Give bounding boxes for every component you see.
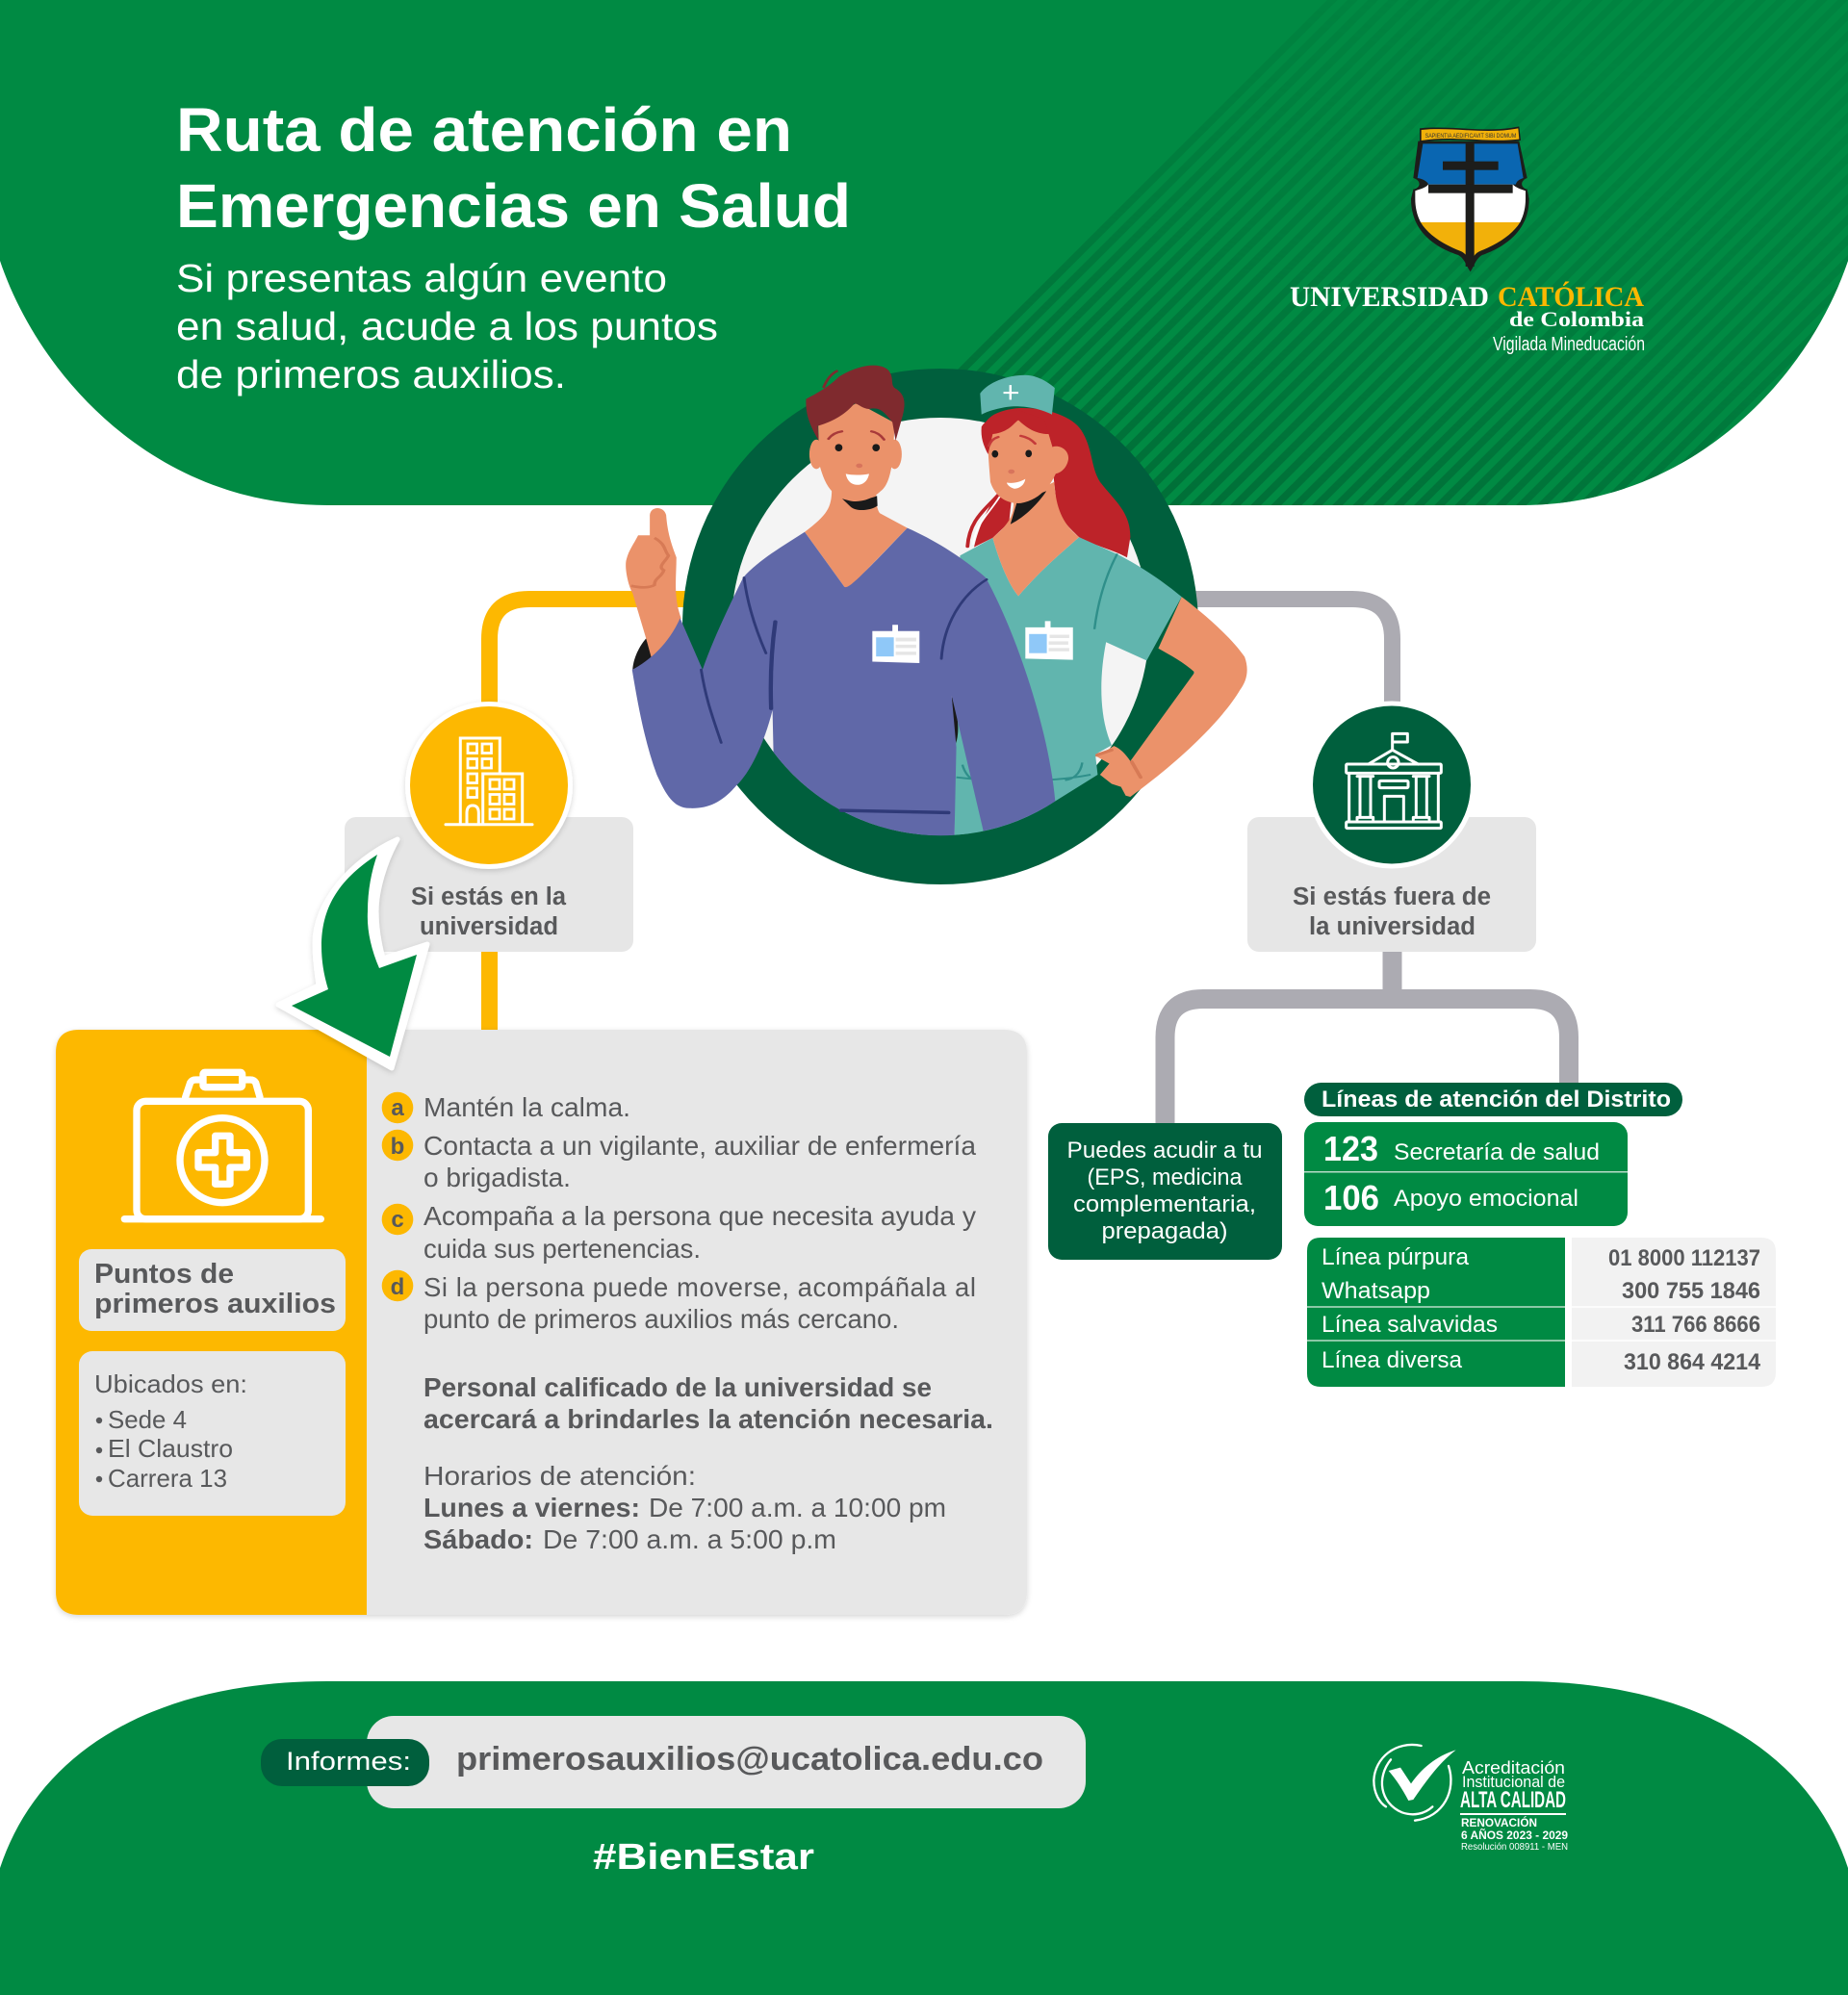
logo: Universidad Católica de Colombia [1290,126,1645,355]
opening hours: De 7:00 a.m. a 10:00 pm [649,1493,946,1522]
opening hours: Sábado: [424,1524,533,1554]
seal text: 6 AÑOS 2023 - 2029 [1461,1829,1568,1842]
box: inside the university: universidad [420,913,558,940]
title [176,95,851,241]
locations list: Sede 4 [108,1405,187,1434]
opening hours: Horarios de atención: [424,1461,696,1491]
hotline box: 123 and 106: Secretaría de salud [1394,1139,1600,1165]
logo wordmark [1290,281,1645,355]
seal text: Acreditación [1462,1758,1565,1778]
step c: Acompaña a la persona que necesita ayuda y [424,1201,976,1231]
box: EPS options: complementaria, [1073,1191,1256,1217]
subtitle: en salud, acude a los puntos [176,304,718,348]
seal text: Resolución 008911 - MEN [1461,1842,1568,1853]
icon: city buildings in yellow circle [405,702,573,869]
box: EPS options [1048,1123,1282,1260]
icon: shield: SAPIENTIA AEDIFICAVIT SIBI DOMUM [1425,133,1516,140]
logo wordmark: UNIVERSIDAD [1290,281,1489,313]
table: phone lines: Whatsapp [1322,1278,1430,1304]
box: inside the university: Si estás en la [411,883,567,910]
note: qualified staff [424,1372,993,1434]
connector lines: yellow and grey routes [489,599,1569,1126]
contact email pill: primerosauxilios@ucatolica.edu.co [456,1741,1043,1778]
hotline box: 123 and 106: Apoyo emocional [1394,1186,1578,1212]
icon: first aid kit [124,1072,321,1219]
step d: punto de primeros auxilios más cercano. [424,1304,899,1334]
table: phone lines: 01 8000 112137 [1608,1245,1760,1271]
title: Ruta de atención en [176,95,792,165]
step b [382,1130,977,1192]
note: qualified staff: Personal calificado de la universidad se [424,1372,932,1402]
hotline box: 123 and 106: 123 [1323,1129,1378,1168]
heading: puntos de primeros auxilios: primeros auxilios [94,1289,336,1319]
subtitle: de primeros auxilios. [176,352,566,396]
seal text: Institucional de [1462,1773,1565,1791]
heading: puntos de primeros auxilios [79,1249,346,1331]
box: outside the university: la universidad [1309,913,1476,940]
locations list: Carrera 13 [108,1464,227,1493]
header background [0,0,1848,510]
box: EPS options: (EPS, medicina [1088,1164,1243,1190]
logo wordmark: de Colombia [1509,307,1644,331]
man nurse [626,366,1055,835]
locations list: Ubicados en: [94,1369,247,1398]
locations list: El Claustro [108,1434,233,1463]
step c [382,1201,976,1264]
step a: Mantén la calma. [424,1092,630,1122]
table: phone lines: 311 766 8666 [1631,1312,1760,1338]
subtitle: Si presentas algún evento [176,256,667,300]
step c: cuida sus pertenencias. [424,1234,701,1264]
table: phone lines: Línea diversa [1322,1347,1463,1373]
contact email pill [367,1716,1086,1808]
box: EPS options: prepagada) [1101,1218,1228,1244]
hotline box: 123 and 106 [1304,1122,1628,1226]
box: outside the university [1247,817,1536,952]
footer background [0,1681,1848,1995]
title: Emergencias en Salud [176,171,851,241]
accreditation seal [1373,1745,1568,1853]
hashtag: #BienEstar [593,1837,814,1878]
box: EPS options: Puedes acudir a tu [1066,1138,1263,1164]
hotline box: 123 and 106: 106 [1323,1178,1379,1217]
step b: b [391,1134,404,1160]
woman nurse [955,375,1247,835]
pill: lineas de atencion del distrito: Líneas de atención del Distrito [1322,1087,1671,1113]
box: outside the university: Si estás fuera de [1293,883,1491,910]
step d [382,1270,976,1334]
seal text: RENOVACIÓN [1461,1817,1537,1829]
opening hours [424,1461,946,1554]
table: phone lines: 310 864 4214 [1624,1349,1761,1375]
table: phone lines: Línea salvavidas [1322,1312,1498,1338]
arrow: green curved arrow [278,839,427,1068]
opening hours: De 7:00 a.m. a 5:00 p.m [543,1524,836,1554]
table: phone lines [1307,1238,1776,1387]
step d: d [391,1274,404,1300]
pill: lineas de atencion del distrito [1304,1083,1682,1116]
icon: check in circle [1373,1745,1456,1821]
icon: shield [1411,126,1529,271]
informes label [261,1739,429,1786]
note: qualified staff: acercará a brindarles la atención necesaria. [424,1404,993,1434]
step b: o brigadista. [424,1163,571,1192]
seal text: ALTA CALIDAD [1460,1787,1566,1813]
informes label: Informes: [286,1747,411,1776]
logo wordmark: CATÓLICA [1498,281,1644,313]
table: phone lines: 300 755 1846 [1622,1278,1760,1304]
heading: puntos de primeros auxilios: Puntos de [94,1259,234,1290]
step d: Si la persona puede moverse, acompáñala al [424,1272,976,1302]
icon: university building in green circle [1308,701,1476,868]
subtitle [176,256,718,396]
seal text [1460,1758,1568,1853]
illustration: nurses in circle [626,366,1247,884]
logo wordmark: Vigilada Mineducación [1493,334,1645,355]
locations list [79,1351,346,1516]
box: inside the university [345,817,633,952]
step a: a [391,1095,404,1121]
step c: c [391,1207,404,1233]
table: phone lines: Línea púrpura [1322,1244,1470,1270]
step b: Contacta a un vigilante, auxiliar de enfermería [424,1131,977,1161]
panel: primeros auxilios [56,1030,1027,1615]
opening hours: Lunes a viernes: [424,1493,640,1522]
